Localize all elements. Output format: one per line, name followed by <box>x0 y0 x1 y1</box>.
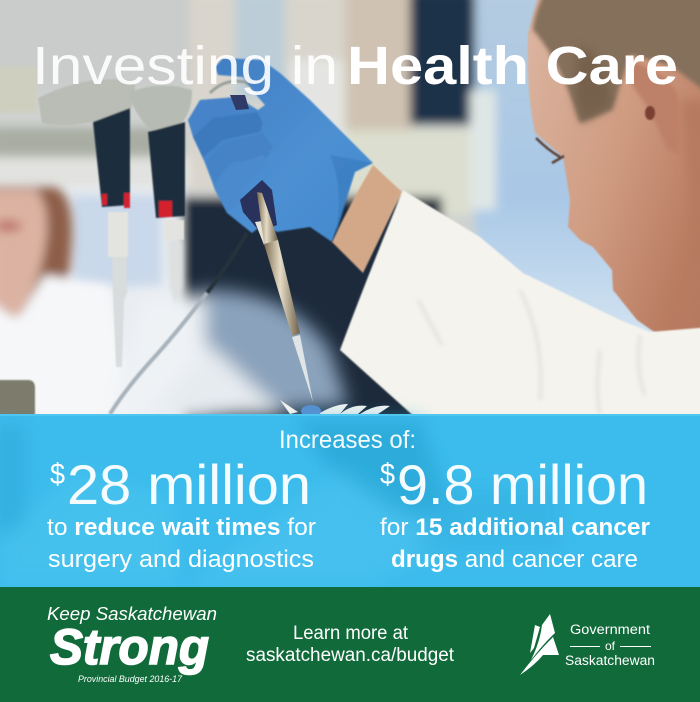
forearm <box>332 165 402 273</box>
cable <box>110 233 247 414</box>
pipette in hand <box>230 95 313 402</box>
budget logo: Keep Saskatchewan Strong: Strong <box>50 619 209 675</box>
instrument at lower left <box>0 380 35 416</box>
government wordmark: Government <box>570 622 650 637</box>
neck shadow <box>680 100 700 330</box>
stat: $28 million: to reduce wait times for <box>47 514 316 541</box>
title: Investing in <box>32 36 338 96</box>
stat: $9.8 million <box>380 453 650 573</box>
temple hair shadow <box>575 45 612 122</box>
blue information band <box>0 414 700 587</box>
ear shadow <box>645 106 655 120</box>
blurred colleague in background <box>0 187 135 420</box>
ear <box>628 60 680 155</box>
band heading: Increases of: <box>279 426 416 454</box>
icon: Government of Saskatchewan logo mark <box>520 614 559 675</box>
man's head <box>528 0 700 334</box>
nostril <box>578 236 588 238</box>
call to action: saskatchewan.ca/budget <box>246 645 455 666</box>
pipette right <box>131 85 192 305</box>
budget logo: Keep Saskatchewan Strong: Keep Saskatchewan <box>47 603 217 624</box>
call to action <box>246 623 455 666</box>
green footer <box>0 587 700 702</box>
tip rack <box>280 400 390 417</box>
stat: $9.8 million: 9.8 million <box>397 453 648 516</box>
wall outlet <box>0 67 37 113</box>
title: Health Care <box>347 36 678 96</box>
band texture: photo showing through <box>0 420 560 586</box>
stat: $9.8 million: for 15 additional cancer <box>380 514 650 541</box>
call to action: Learn more at <box>293 623 409 644</box>
face <box>528 0 700 334</box>
lab coat sleeve <box>340 190 700 420</box>
photo background: blurred laboratory <box>0 0 700 427</box>
budget logo: Keep Saskatchewan Strong <box>47 603 217 685</box>
hair <box>533 0 700 123</box>
title <box>32 36 678 96</box>
government wordmark: Saskatchewan <box>565 653 655 668</box>
government wordmark <box>565 622 655 668</box>
photo: lab technician with pipette <box>0 0 700 427</box>
stat: $28 million: 28 million <box>67 453 311 516</box>
blurred glassware and equipment <box>110 290 348 420</box>
stat: $28 million: $ <box>50 458 65 491</box>
pipette ring behind the hand <box>210 81 258 93</box>
budget logo: Keep Saskatchewan Strong: Provincial Budget 2016-17 <box>78 674 183 685</box>
glove <box>188 58 373 242</box>
eye <box>536 138 564 163</box>
coat folds <box>418 290 645 414</box>
pipette left <box>38 79 135 367</box>
stat: $28 million: surgery and diagnostics <box>48 546 314 573</box>
stat: $28 million <box>47 453 316 573</box>
government wordmark: of <box>605 639 616 653</box>
stat: $9.8 million: $ <box>380 458 395 491</box>
stat: $9.8 million: drugs and cancer care <box>391 546 638 573</box>
